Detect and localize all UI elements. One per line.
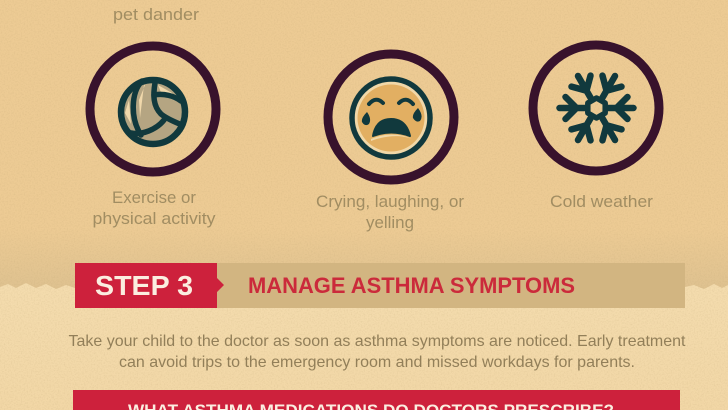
icon: crying face	[328, 54, 454, 180]
label: cold weather: Cold weather	[550, 193, 654, 211]
icon detail: ball centre seam	[154, 83, 182, 125]
heading band: step 3: MANAGE ASTHMA SYMPTOMS	[248, 273, 575, 298]
label: physical activity: physical activity	[92, 210, 216, 228]
background: lower torn paper	[0, 283, 728, 410]
background: upper paper	[0, 0, 728, 300]
label: pet dander: pet dander	[113, 6, 200, 24]
heading band: step 3: STEP 3	[95, 270, 193, 301]
icon detail: ball right seam	[154, 94, 181, 101]
icon detail: ball left seam	[133, 81, 142, 135]
banner: medications question	[73, 390, 680, 410]
icon: snowflake	[533, 45, 659, 171]
body text line 2: can avoid trips to the emergency room and missed workdays for parents.	[119, 354, 635, 371]
body text line 1: Take your child to the doctor as soon as asthma symptoms are noticed. Early treatment	[68, 333, 686, 350]
icon: exercise volleyball	[90, 46, 216, 172]
label: crying: Crying, laughing, or	[316, 193, 465, 211]
heading band: step 3	[75, 263, 685, 308]
label: exercise: Exercise or	[112, 189, 197, 207]
icon detail: ball lower seam	[131, 120, 164, 133]
label: yelling: yelling	[366, 214, 414, 232]
